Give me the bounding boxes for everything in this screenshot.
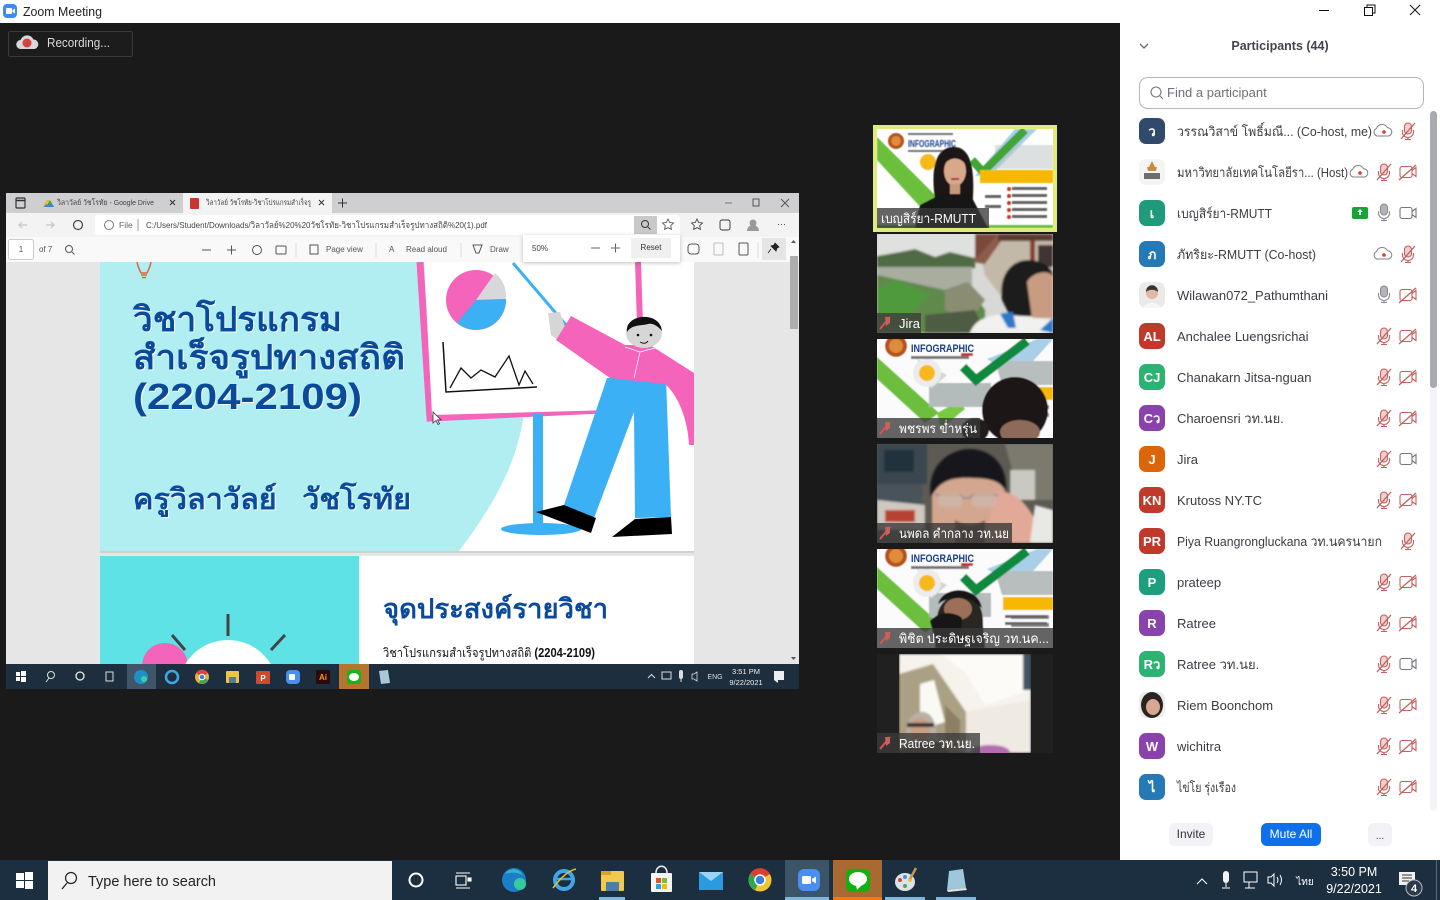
video tile: เบญสิร์ยา-RMUTT bbox=[873, 125, 1057, 232]
pdf toolbar: A bbox=[389, 245, 395, 254]
name label: เบญสิร์ยา-RMUTT bbox=[881, 211, 976, 226]
heading: teacher name: ครูวิลาวัลย์ วัชโรทัย bbox=[133, 481, 411, 517]
participant row: Wilawan072_Pathumthani bbox=[1177, 288, 1328, 303]
button: mute all bbox=[1261, 823, 1321, 846]
button: mute all: Mute All bbox=[1270, 827, 1312, 841]
participant row bbox=[1139, 692, 1416, 718]
pdf toolbar: Page view bbox=[326, 245, 363, 254]
address bar: C:/Users/Student/Downloads/วิลาวัลย์%20%20วัชโรทัย-วิชาโปรแกรมสำเร็จรูปทางสถิติ%20(1).pdf bbox=[146, 219, 488, 231]
participant row: PR bbox=[1143, 534, 1162, 549]
name label bbox=[877, 313, 921, 333]
heading: participants: Participants (44) bbox=[1231, 39, 1329, 53]
participant row: Piya Ruangrongluckana วท.นครนายก bbox=[1177, 534, 1382, 549]
participant row bbox=[1139, 651, 1416, 677]
poster and person: INFOGRAPHIC bbox=[911, 343, 974, 355]
participant row bbox=[1139, 774, 1416, 800]
illustration: light bulb rays bbox=[142, 614, 286, 664]
video tile: Jira bbox=[877, 234, 1053, 333]
button: more bbox=[1368, 823, 1392, 846]
icon: cortana bbox=[410, 874, 422, 886]
zoom popup: 50% bbox=[532, 244, 548, 253]
participant row: R bbox=[1147, 616, 1157, 631]
chevron bbox=[1140, 44, 1148, 48]
icon: file explorer bbox=[599, 871, 625, 900]
participant row: ไ bbox=[1147, 779, 1156, 795]
participant row: P bbox=[1148, 575, 1157, 590]
panel: shared screen bbox=[6, 193, 799, 740]
remote taskbar: 3:51 PM bbox=[732, 667, 760, 676]
icon: internet explorer bbox=[553, 869, 576, 889]
participant row bbox=[1139, 528, 1415, 554]
search box bbox=[48, 861, 392, 900]
icon: task view bbox=[456, 873, 471, 888]
poster and man with mask bbox=[877, 545, 1053, 648]
video tile: Ratree bbox=[877, 654, 1031, 753]
title text: Zoom Meeting bbox=[23, 4, 102, 19]
heading: objectives: จุดประสงค์รายวิชา bbox=[383, 593, 608, 626]
pdf toolbar: Read aloud bbox=[406, 245, 447, 254]
poster and presenter: INFOGRAPHIC bbox=[908, 139, 956, 150]
participant row: J bbox=[1148, 452, 1156, 467]
participant row bbox=[1139, 487, 1416, 513]
title bar bbox=[0, 0, 1440, 23]
icon: notepad bbox=[936, 869, 976, 900]
participant row: CJ bbox=[1144, 370, 1160, 385]
name label: นพดล คำกลาง วท.นย bbox=[899, 526, 1009, 541]
participant row: ว bbox=[1148, 124, 1156, 139]
icon: mail bbox=[699, 872, 723, 890]
participant row: วรรณวิสาข์ โพธิ์มณี... (Co-host, me) bbox=[1177, 122, 1372, 139]
participant row: เบญสิร์ยา-RMUTT bbox=[1177, 206, 1272, 221]
remote taskbar bbox=[6, 664, 799, 689]
remote taskbar: 9/22/2021 bbox=[729, 678, 763, 687]
cyan background shape bbox=[100, 262, 525, 551]
browser tab bar: วิลาวัลย์ วัชโรทัย-วิชาโปรแกรมสำเร็จรู bbox=[205, 197, 311, 207]
system tray bbox=[1197, 860, 1437, 900]
panel: pdf page one bbox=[100, 262, 694, 664]
participant row bbox=[1139, 118, 1415, 144]
name label bbox=[877, 628, 1053, 648]
participant row bbox=[1139, 405, 1416, 431]
heading: course title: สำเร็จรูปทางสถิติ bbox=[133, 336, 405, 379]
browser tab bar: วิลาวัลย์ วัชโรทัย - Google Drive bbox=[56, 198, 154, 207]
icon: zoom logo bbox=[3, 4, 17, 18]
search box bbox=[1140, 78, 1424, 108]
name label: Jira bbox=[899, 316, 921, 331]
icon: edge bbox=[502, 868, 526, 892]
windows taskbar bbox=[0, 860, 1440, 900]
name label bbox=[877, 208, 989, 228]
remote taskbar: P bbox=[260, 674, 266, 683]
name label bbox=[877, 523, 1012, 543]
icon: zoom bbox=[785, 860, 829, 900]
participant row: Charoensri วท.นย. bbox=[1177, 411, 1284, 426]
participant row: prateep bbox=[1177, 575, 1221, 590]
participant row bbox=[1139, 446, 1416, 472]
participant row: W bbox=[1146, 739, 1159, 754]
participant row: Cว bbox=[1144, 411, 1160, 426]
address bar: ··· bbox=[777, 219, 786, 229]
video tile: นพดล bbox=[877, 444, 1053, 543]
man portrait bbox=[877, 444, 1053, 543]
cursor bbox=[433, 412, 441, 424]
zoom popup: Reset bbox=[641, 243, 662, 252]
remote taskbar: Ai bbox=[319, 673, 327, 682]
icon: recording cloud bbox=[16, 35, 38, 49]
list scrollbar bbox=[1430, 111, 1437, 811]
panel: pdf page two bbox=[100, 556, 694, 664]
room and woman bbox=[899, 654, 1031, 759]
button: more: ... bbox=[1376, 831, 1384, 842]
system tray: 4 bbox=[1411, 883, 1418, 895]
poster and man with mask: INFOGRAPHIC bbox=[911, 553, 974, 565]
search box: Type here to search bbox=[88, 874, 216, 890]
participant row: AL bbox=[1143, 329, 1161, 344]
system tray: ไทย bbox=[1295, 876, 1314, 888]
participant row: Rว bbox=[1144, 657, 1160, 672]
button: invite: Invite bbox=[1177, 827, 1206, 841]
participant row: Anchalee Luengsrichai bbox=[1177, 329, 1309, 344]
participant row: ภ bbox=[1148, 247, 1156, 262]
name label: พชรพร ข่ำหรุ่น bbox=[899, 420, 977, 437]
video tile: พชรพร bbox=[877, 335, 1053, 444]
participant row: Ratree bbox=[1177, 616, 1216, 631]
browser tab bar bbox=[6, 193, 799, 213]
name label bbox=[877, 733, 980, 753]
easel stand bbox=[501, 414, 581, 535]
participant row bbox=[1139, 323, 1416, 349]
icon: line bbox=[833, 860, 882, 900]
button: invite bbox=[1169, 823, 1213, 846]
scrollbar bbox=[790, 240, 798, 660]
system tray: 3:50 PM bbox=[1331, 865, 1377, 879]
participant row: Riem Boonchom bbox=[1177, 698, 1273, 713]
participant row bbox=[1139, 733, 1416, 759]
participant row: Chanakarn Jitsa-nguan bbox=[1177, 370, 1311, 385]
system tray: 9/22/2021 bbox=[1326, 882, 1382, 896]
poster and person bbox=[877, 335, 1053, 444]
icon: light bulb bbox=[137, 262, 151, 278]
participant row bbox=[1139, 282, 1416, 308]
line chart bbox=[443, 342, 537, 392]
icon: start bbox=[16, 872, 33, 889]
participant row: ไข่โย รุ่งเรือง bbox=[1176, 780, 1236, 796]
icon: paint bbox=[885, 868, 925, 900]
participant row: Ratree วท.นย. bbox=[1177, 657, 1259, 672]
participant row: Jira bbox=[1177, 452, 1199, 467]
pie chart bbox=[446, 270, 506, 330]
zoom popup bbox=[523, 235, 680, 262]
window controls bbox=[1319, 5, 1420, 16]
participant row: KN bbox=[1143, 493, 1161, 508]
text: course line: วิชาโปรแกรมสำเร็จรูปทางสถิติ (2204-2109) bbox=[383, 645, 595, 661]
pdf viewer background bbox=[6, 262, 799, 664]
address bar bbox=[6, 213, 799, 237]
panel: participants bbox=[1120, 23, 1440, 860]
participant row: ภัทริยะ-RMUTT (Co-host) bbox=[1177, 247, 1316, 262]
presentation board bbox=[420, 262, 640, 418]
participant row: Krutoss NY.TC bbox=[1177, 493, 1262, 508]
participant row bbox=[1139, 610, 1416, 636]
name label: พิชิต ประดิษฐเจริญ วท.นค... bbox=[899, 631, 1049, 647]
participant row bbox=[1139, 364, 1416, 390]
pdf toolbar: 1 bbox=[19, 245, 24, 254]
panel: video gallery bbox=[873, 125, 1057, 759]
participant row: wichitra bbox=[1176, 739, 1222, 754]
name label bbox=[877, 418, 980, 438]
participant row bbox=[1139, 241, 1415, 267]
remote taskbar: ENG bbox=[707, 674, 723, 681]
pdf toolbar: of 7 bbox=[39, 245, 53, 254]
video tile: พิชิต bbox=[877, 545, 1053, 648]
participant row: เ bbox=[1150, 206, 1154, 221]
address bar: File bbox=[119, 220, 133, 230]
participant row: มหาวิทยาลัยเทคโนโลยีรา... (Host) bbox=[1177, 165, 1348, 180]
pdf toolbar bbox=[6, 237, 799, 262]
search box: Find a participant bbox=[1167, 85, 1267, 100]
person illustration bbox=[513, 263, 694, 537]
icon: store bbox=[651, 866, 672, 892]
participant row bbox=[1139, 569, 1416, 595]
pdf toolbar: Draw bbox=[490, 245, 509, 254]
poster and presenter bbox=[877, 129, 1053, 228]
participant row bbox=[1139, 200, 1416, 226]
recording badge bbox=[8, 32, 132, 56]
name label: Ratree วท.นย. bbox=[899, 736, 975, 751]
heading: course title: (2204-2109) bbox=[133, 376, 362, 417]
participant row bbox=[1139, 159, 1416, 185]
heading: course title bbox=[132, 299, 405, 417]
outdoor scene and person bbox=[877, 234, 1053, 333]
icon: chrome bbox=[748, 868, 772, 892]
heading: course title: วิชาโปรแกรม bbox=[132, 299, 342, 339]
recording text: Recording... bbox=[47, 35, 110, 50]
